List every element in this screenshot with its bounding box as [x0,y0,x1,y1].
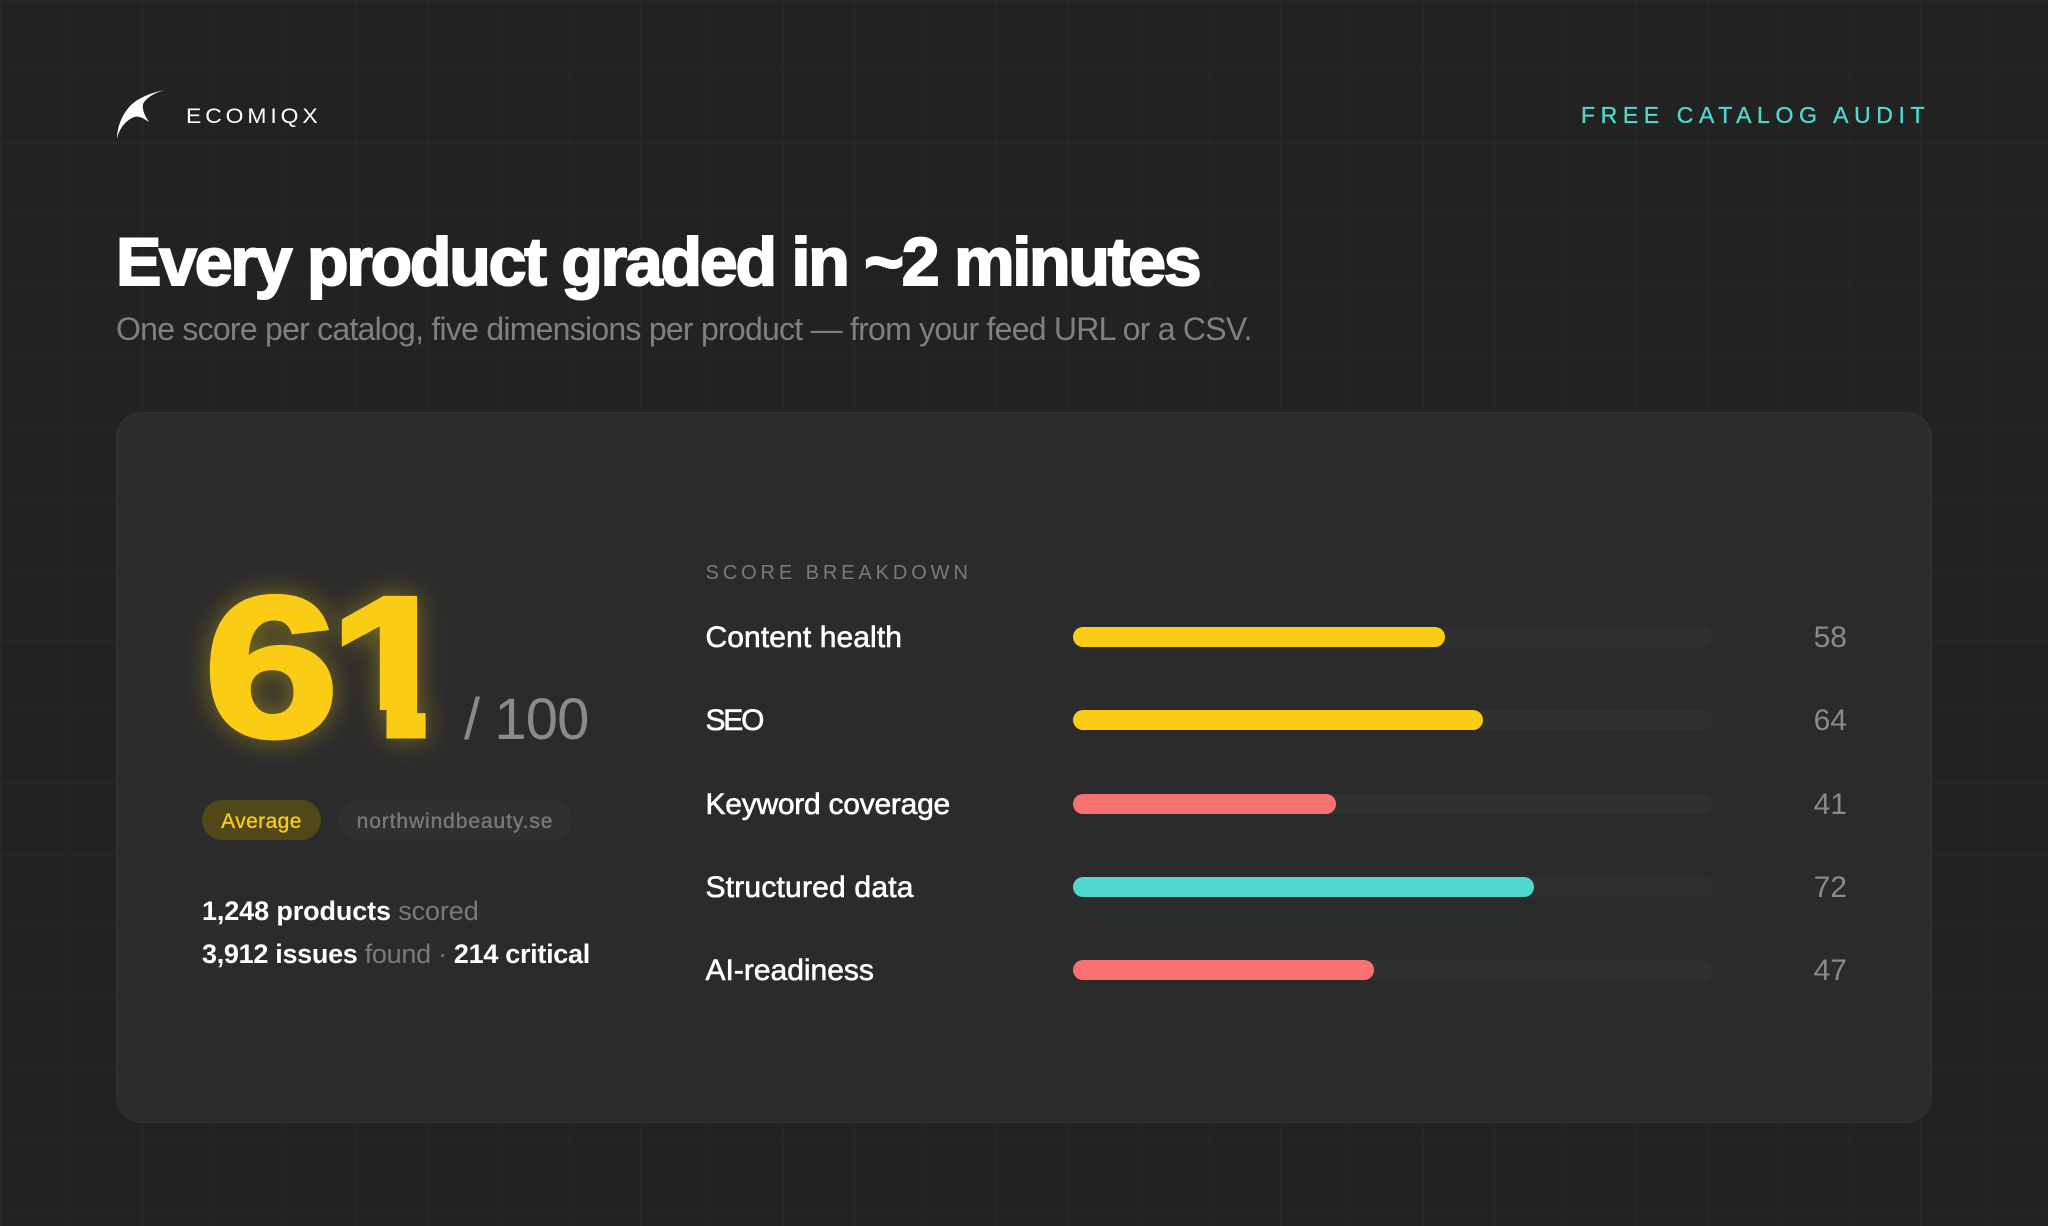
badge: domain [338,800,572,840]
row: structured data [706,871,1847,904]
title: Every product graded in ~2 minutes [116,224,1199,300]
text: 47 [1814,954,1847,987]
stat: products: 1,248 products scored [202,896,479,926]
row: AI-readiness [705,954,1847,987]
text: Content health [706,621,902,654]
big score: 1 [329,556,457,779]
breakdown heading: SCORE BREAKDOWN [706,562,972,584]
row: content health [706,621,1847,654]
text: Keyword coverage [706,788,950,821]
row: SEO [706,704,1847,737]
header tag: FREE CATALOG AUDIT [1581,102,1930,128]
text: 72 [1814,871,1847,904]
text: 64 [1814,704,1847,737]
panel: score card [116,412,1932,1123]
big score: 6 [204,556,338,779]
badge: domain: northwindbeauty.se [357,810,553,833]
row: keyword coverage [706,788,1847,821]
text: Structured data [706,871,914,904]
icon: logo swoosh [117,90,164,138]
big score [193,556,440,779]
text: SEO [706,704,762,737]
text: AI-readiness [706,954,874,987]
badge: rating [202,800,321,840]
text: 58 [1814,621,1847,654]
brand name: ECOMIQX [186,104,321,128]
badge: rating: Average [221,810,302,833]
score denominator: / 100 [464,687,588,752]
stat: issues: 3,912 issues found · 214 critical [202,939,590,969]
text: 41 [1814,788,1847,821]
subtitle: One score per catalog, five dimensions per product — from your feed URL or a CSV. [116,311,1252,347]
logo [117,90,321,138]
